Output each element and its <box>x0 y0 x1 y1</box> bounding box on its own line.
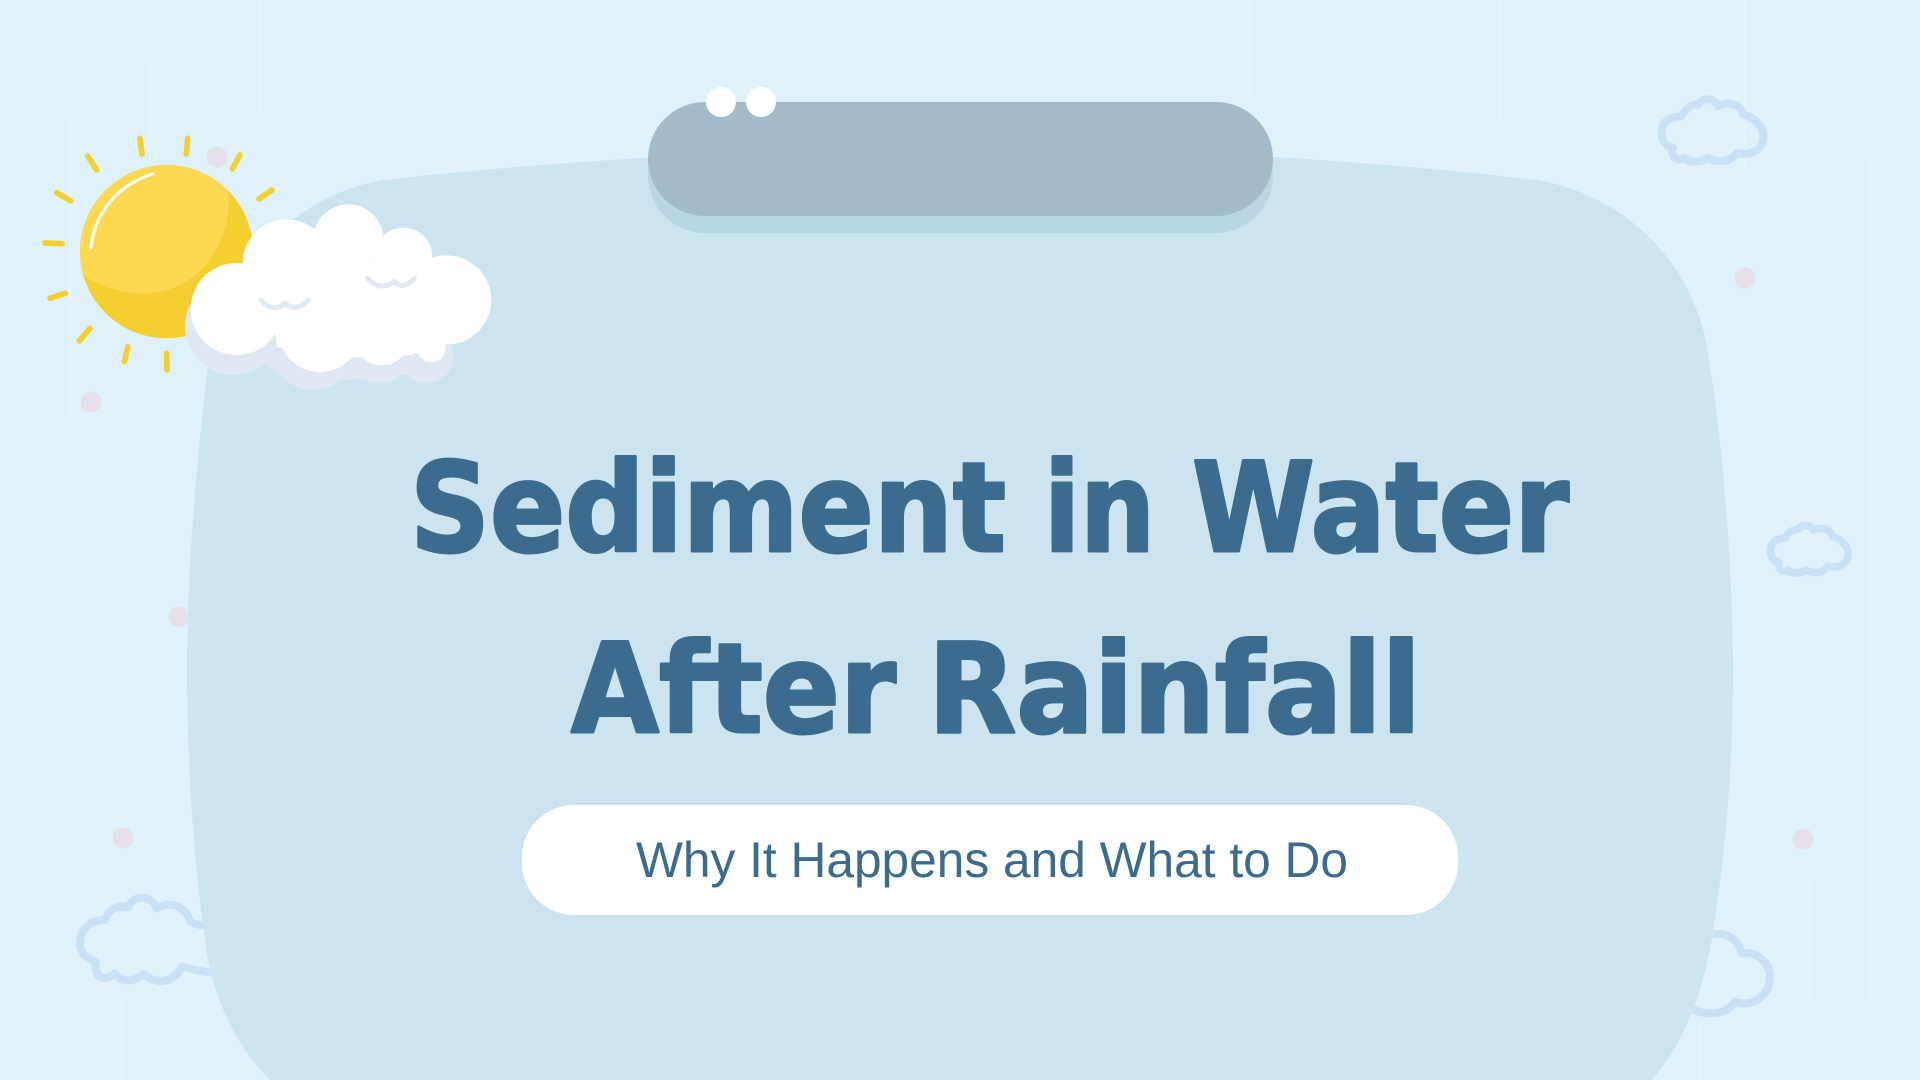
title <box>410 437 1569 762</box>
title line 1: Sediment <box>410 437 1006 581</box>
cloud outline: middle right <box>1770 525 1848 573</box>
subtitle text: Why It Happens and What to Do <box>636 832 1348 888</box>
top tab <box>648 87 1273 233</box>
cloud shadow <box>185 278 453 390</box>
cloud body <box>191 204 491 372</box>
title line 2: After <box>571 618 896 762</box>
cloud marks <box>261 278 414 308</box>
icon: sun <box>45 123 272 370</box>
icon: white cloud <box>185 204 491 390</box>
sun disc <box>80 165 252 338</box>
sun rays <box>45 138 272 370</box>
main panel <box>187 157 1733 1080</box>
title line 1: Water <box>1192 437 1569 581</box>
title line 2: Rainfall <box>928 618 1421 762</box>
title line 2 <box>571 618 1421 762</box>
sun highlight <box>91 174 153 248</box>
cloud outline: top right <box>1662 99 1763 162</box>
title line 1: in <box>1044 437 1155 581</box>
cloud outline: bottom left <box>80 898 227 981</box>
cloud outline: bottom right <box>1693 934 1770 1013</box>
subtitle pill <box>522 805 1458 915</box>
decorative pink dots <box>80 146 1814 850</box>
tab holes <box>706 87 776 117</box>
title line 1 <box>410 437 1569 581</box>
